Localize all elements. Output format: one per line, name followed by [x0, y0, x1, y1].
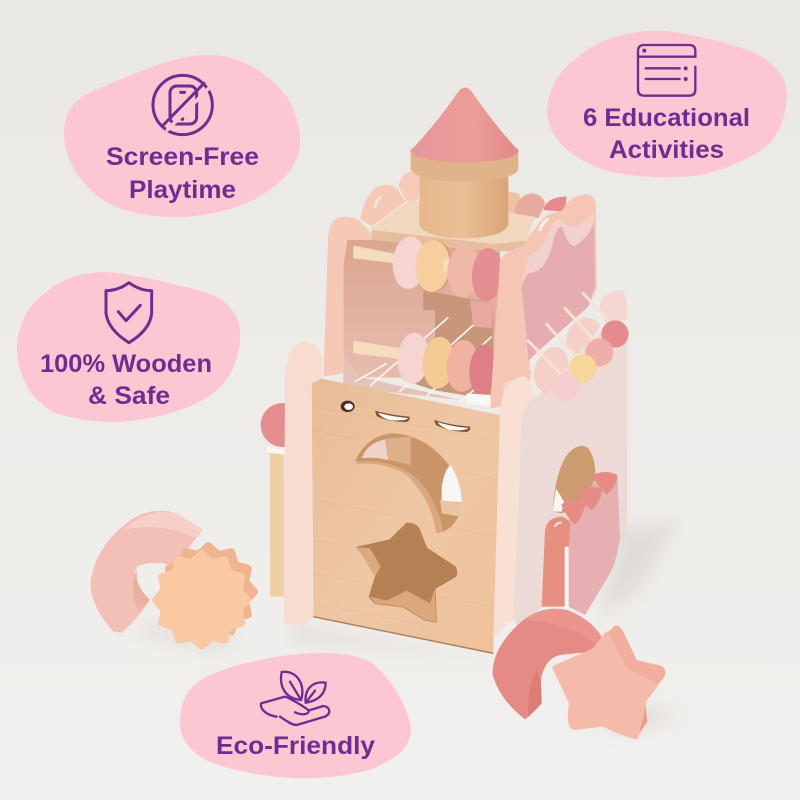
star cut-out: [357, 523, 457, 622]
loose shape: rose moon: [493, 609, 602, 719]
back beads: [514, 193, 545, 218]
lower box: [261, 326, 627, 653]
text: screen-free playtime: Screen-Free: [106, 143, 259, 171]
text: 100% wooden and safe: [40, 350, 212, 410]
badge: 100% wooden and safe: [17, 272, 240, 422]
text: 6 educational activities: [583, 104, 750, 164]
right panel: [493, 194, 597, 408]
text: 6 educational activities: Activities: [609, 136, 724, 164]
cap band: [411, 148, 518, 182]
upper tower: [323, 172, 597, 408]
small door: [542, 473, 620, 615]
front wood face: [312, 378, 500, 653]
icon: crossed-out phone: [153, 75, 212, 135]
lacing slots: [341, 401, 470, 432]
side bead strings: [528, 290, 629, 401]
left front post: [284, 342, 322, 626]
strings: [528, 293, 608, 375]
abacus row 2: [353, 332, 499, 397]
top block: [372, 200, 535, 251]
badge: 6 educational activities: [547, 31, 787, 177]
bead wave panels: [533, 347, 568, 395]
text: screen-free playtime: [106, 143, 259, 204]
tower cap: [411, 87, 518, 238]
text: 100% wooden and safe: & Safe: [88, 382, 170, 410]
badge: eco-friendly: [180, 653, 411, 778]
right panel front edge: [490, 246, 532, 408]
beads: [601, 320, 629, 348]
text: screen-free playtime: Playtime: [129, 176, 236, 204]
abacus row 1: [353, 235, 504, 302]
base shadow line: [313, 617, 493, 653]
cast shadows: [120, 520, 682, 730]
inner wall: [343, 237, 500, 380]
icon: activity panel: [638, 45, 695, 96]
white gap behind abacus: [467, 393, 491, 407]
cylinder: [419, 173, 508, 238]
white wires: [355, 317, 492, 402]
icon: hand holding plant: [261, 672, 329, 725]
badge: screen-free playtime: [64, 55, 300, 217]
loose shape: pale moon: [90, 511, 203, 633]
text: eco-friendly: Eco-Friendly: [216, 732, 375, 760]
loose shape: sun: [156, 546, 254, 646]
icon: shield with check: [106, 283, 152, 343]
wood grain: [313, 407, 498, 627]
text: 100% wooden and safe: 100% Wooden: [40, 350, 212, 378]
left upper post: [323, 217, 372, 377]
product: wooden activity tower: [261, 87, 629, 653]
cone: [411, 87, 518, 162]
back crenels: [398, 172, 419, 202]
mallet: [261, 403, 305, 597]
text: 6 educational activities: 6 Educational: [583, 104, 750, 132]
right side panel: [500, 326, 627, 627]
crescent cut-out: [355, 433, 462, 533]
left scallop: [360, 185, 406, 227]
window arch: [553, 446, 595, 513]
loose shape: star: [554, 625, 665, 738]
front right post: [493, 376, 535, 638]
